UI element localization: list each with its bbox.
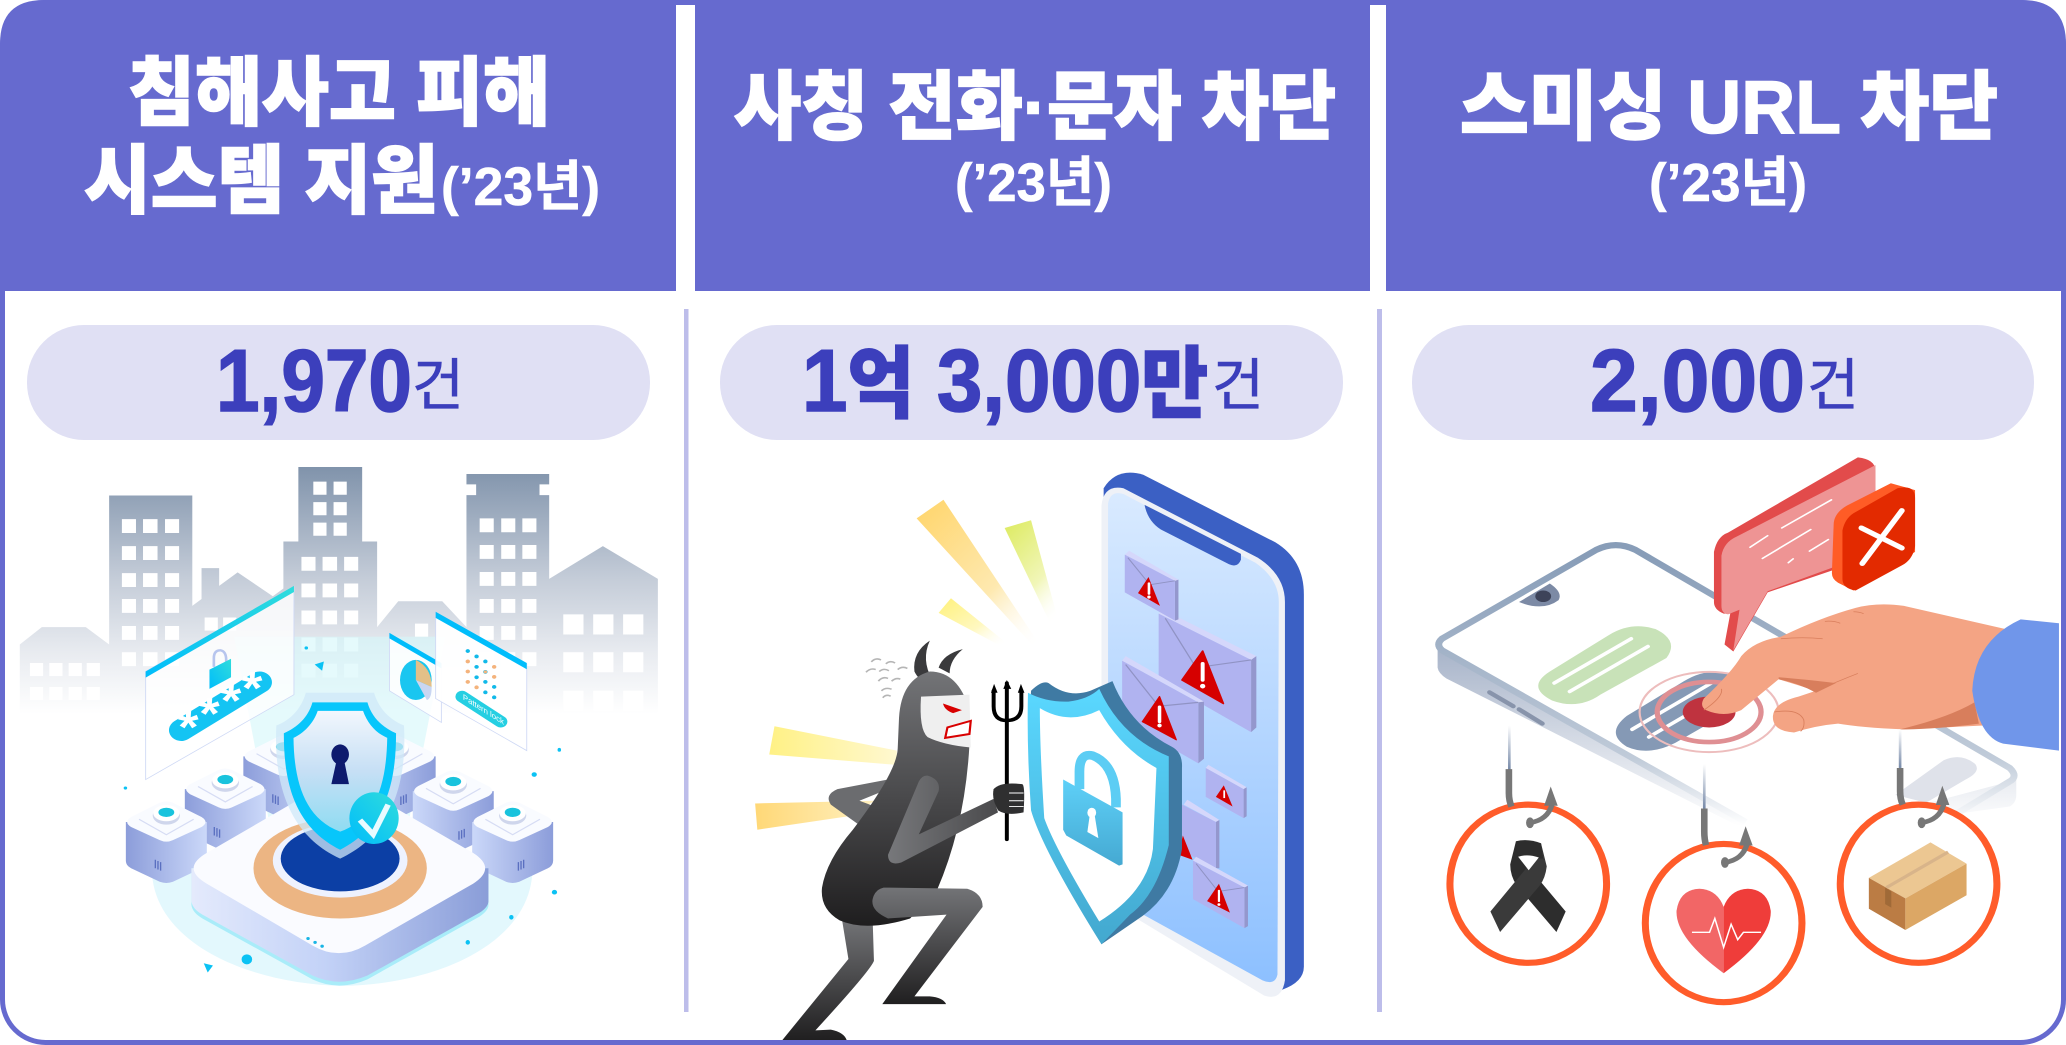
grey phishing bubble bbox=[1616, 672, 1732, 751]
illustration: protected city and security platform bbox=[20, 467, 658, 986]
back leg bbox=[782, 918, 874, 1040]
hook lines bbox=[1508, 726, 1901, 808]
pattern lock panel bbox=[436, 612, 527, 751]
front leg bbox=[872, 888, 983, 1004]
smartphone bbox=[1101, 473, 1304, 997]
warning envelopes bbox=[1122, 551, 1256, 928]
value pill: 1억 3,000만건 bbox=[720, 325, 1343, 440]
sleeve bbox=[1972, 619, 2059, 751]
heading: column 1: 침해사고 피해 bbox=[128, 51, 550, 135]
horns bbox=[914, 641, 963, 681]
light beam bbox=[234, 637, 445, 841]
column divider 2 bbox=[1377, 309, 1382, 1012]
chart panel bbox=[389, 633, 441, 722]
touch ripple bbox=[1640, 672, 1779, 752]
glow under platform bbox=[152, 868, 532, 986]
value pill: 1,970건 bbox=[27, 325, 650, 440]
heading: column 3: (’23년) bbox=[1649, 153, 1807, 213]
illustration: smishing link blocked on phone with hooks bbox=[1438, 457, 2059, 1002]
speech bubble bbox=[1714, 457, 1875, 651]
sparkle dots bbox=[124, 646, 561, 972]
illustration: scammer blocked by shield in front of phone bbox=[755, 473, 1304, 1040]
sweat marks bbox=[866, 659, 907, 698]
login panel: * bbox=[199, 687, 220, 740]
hand bbox=[993, 783, 1024, 814]
back arm bbox=[829, 780, 888, 825]
faded bubble at bottom bbox=[1895, 757, 1977, 803]
header separator right bbox=[1370, 5, 1386, 291]
green message bubble bbox=[1538, 626, 1671, 704]
server boxes bbox=[126, 736, 553, 883]
devil character bbox=[782, 641, 1024, 1040]
phone bbox=[1438, 545, 2016, 830]
heading: column 1: 시스템 지원 bbox=[84, 139, 438, 223]
heading: column 2 bbox=[734, 65, 1336, 213]
heading: column 3: 스미싱 URL 차단 bbox=[1460, 65, 1998, 149]
heading: column 2: 사칭 전화·문자 차단 bbox=[734, 65, 1336, 149]
face bbox=[921, 695, 971, 748]
light rays bbox=[755, 500, 1061, 830]
login panel: * bbox=[242, 662, 263, 714]
value pill: 2,000건: 건 bbox=[1807, 341, 1859, 422]
login panel: * bbox=[178, 701, 199, 753]
hand bbox=[1702, 604, 2005, 732]
value pill: 1,970건: 1,970 bbox=[216, 331, 412, 430]
header separator left bbox=[676, 5, 695, 291]
blocked x badge bbox=[1832, 483, 1915, 590]
heading: column 1: (’23년) bbox=[441, 157, 600, 217]
login panel bbox=[146, 586, 294, 780]
shield with padlock bbox=[1028, 681, 1182, 944]
circle: parcel bbox=[1840, 768, 1997, 963]
column divider 1 bbox=[684, 309, 688, 1012]
torso bbox=[822, 672, 969, 926]
circle: ribbon bbox=[1450, 769, 1607, 963]
login panel: * bbox=[221, 675, 242, 727]
shield with keyhole bbox=[276, 693, 404, 859]
heading: column 1 bbox=[84, 51, 600, 223]
value pill: 2,000건 bbox=[1412, 325, 2034, 440]
city skyline bbox=[20, 467, 658, 714]
front arm bbox=[888, 776, 998, 863]
circle: heart bbox=[1645, 808, 1802, 1002]
check badge bbox=[349, 792, 399, 844]
platform bbox=[191, 783, 488, 986]
value pill: 1억 3,000만건: 건 bbox=[1212, 341, 1264, 422]
heading: column 2: (’23년) bbox=[955, 153, 1112, 213]
value pill: 2,000건: 2,000 bbox=[1590, 331, 1805, 430]
value pill: 1억 3,000만건: 1억 3,000만 bbox=[802, 331, 1208, 430]
header band bbox=[0, 0, 2066, 291]
heading: column 3 bbox=[1460, 65, 1998, 213]
trident bbox=[994, 683, 1021, 839]
pattern lock panel: Pattern lock bbox=[463, 692, 504, 727]
value pill: 1,970건: 건 bbox=[412, 341, 464, 422]
